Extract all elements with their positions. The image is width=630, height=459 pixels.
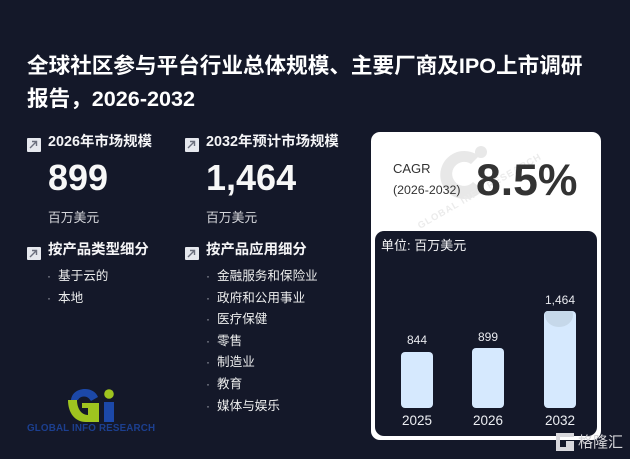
bar: 2032 xyxy=(544,293,576,428)
icon: arrow 2032 xyxy=(185,138,198,152)
label: CAGR: CAGR xyxy=(393,161,431,176)
list: product types: · xyxy=(47,291,51,305)
list: applications: · xyxy=(206,312,210,326)
panel: 2032 forecast market size xyxy=(185,134,339,225)
bar: 2032: 1,464 xyxy=(545,293,575,307)
list: product types: 本地 xyxy=(58,291,83,305)
label: CAGR: (2026-2032) xyxy=(393,183,461,197)
icon: Gi mark xyxy=(68,389,114,422)
title: 报告，2026-2032 xyxy=(27,86,195,111)
list: applications: · xyxy=(206,377,210,391)
bar: 2025: 844 xyxy=(407,333,427,347)
list: applications: 零售 xyxy=(217,334,242,348)
logo text: GLOBAL INFO RESEARCH xyxy=(27,423,155,434)
list: applications: · xyxy=(206,291,210,305)
value: 1,464: 1,464 xyxy=(206,157,296,198)
watermark: Gelonghui xyxy=(556,433,623,451)
value: 8.5%: 8.5% xyxy=(476,156,577,205)
title: 全球社区参与平台行业总体规模、主要厂商及IPO上市调研 xyxy=(27,53,582,78)
list: applications: 金融服务和保险业 xyxy=(217,269,318,283)
icon: arrow type xyxy=(27,246,40,260)
panel: segment by product type xyxy=(27,242,149,305)
icon: arrow 2026 xyxy=(27,138,40,152)
chart unit: 单位: 百万美元 xyxy=(381,238,466,253)
list: applications: 医疗保健 xyxy=(217,312,267,326)
bar: 2025 xyxy=(401,333,433,428)
bar: 2026 xyxy=(472,330,504,428)
list: applications: 教育 xyxy=(217,377,242,391)
list: applications xyxy=(206,269,318,413)
list: applications: · xyxy=(206,355,210,369)
unit: 百万美元 xyxy=(206,210,257,225)
list: applications: 政府和公用事业 xyxy=(217,291,305,305)
label: CAGR xyxy=(393,161,461,197)
panel: segment by application xyxy=(185,242,318,413)
heading: by product type: 按产品类型细分 xyxy=(48,242,149,258)
list: product types: 基于云的 xyxy=(58,269,108,283)
title xyxy=(27,53,582,111)
bar: 2026: 2026 xyxy=(473,413,503,428)
heading: 2032 market size: 2032年预计市场规模 xyxy=(206,134,339,150)
list: applications: · xyxy=(206,269,210,283)
logo: Global Info Research xyxy=(27,389,155,434)
list: product types xyxy=(47,269,108,305)
watermark: card Gi: GLOBAL INFO RESEARCH xyxy=(416,151,544,232)
heading: 2026 market size: 2026年市场规模 xyxy=(48,134,152,150)
value: 899: 899 xyxy=(48,157,108,198)
bar: 2032: 2032 xyxy=(545,413,575,428)
panel: bar chart xyxy=(375,231,597,436)
icon: Gelonghui mark xyxy=(556,433,574,451)
bar: 2026: 899 xyxy=(478,330,498,344)
bar: 2025: 2025 xyxy=(402,413,432,428)
brand text: 格隆汇 xyxy=(578,434,623,451)
unit: 百万美元 xyxy=(48,210,99,225)
panel: 2026 market size xyxy=(27,134,152,225)
heading: by application: 按产品应用细分 xyxy=(206,242,307,258)
list: applications: 制造业 xyxy=(217,355,255,369)
list: product types: · xyxy=(47,269,51,283)
panel: CAGR card xyxy=(371,132,601,440)
list: applications: 媒体与娱乐 xyxy=(217,399,280,413)
list: applications: · xyxy=(206,334,210,348)
icon: arrow application xyxy=(185,246,198,260)
list: applications: · xyxy=(206,399,210,413)
